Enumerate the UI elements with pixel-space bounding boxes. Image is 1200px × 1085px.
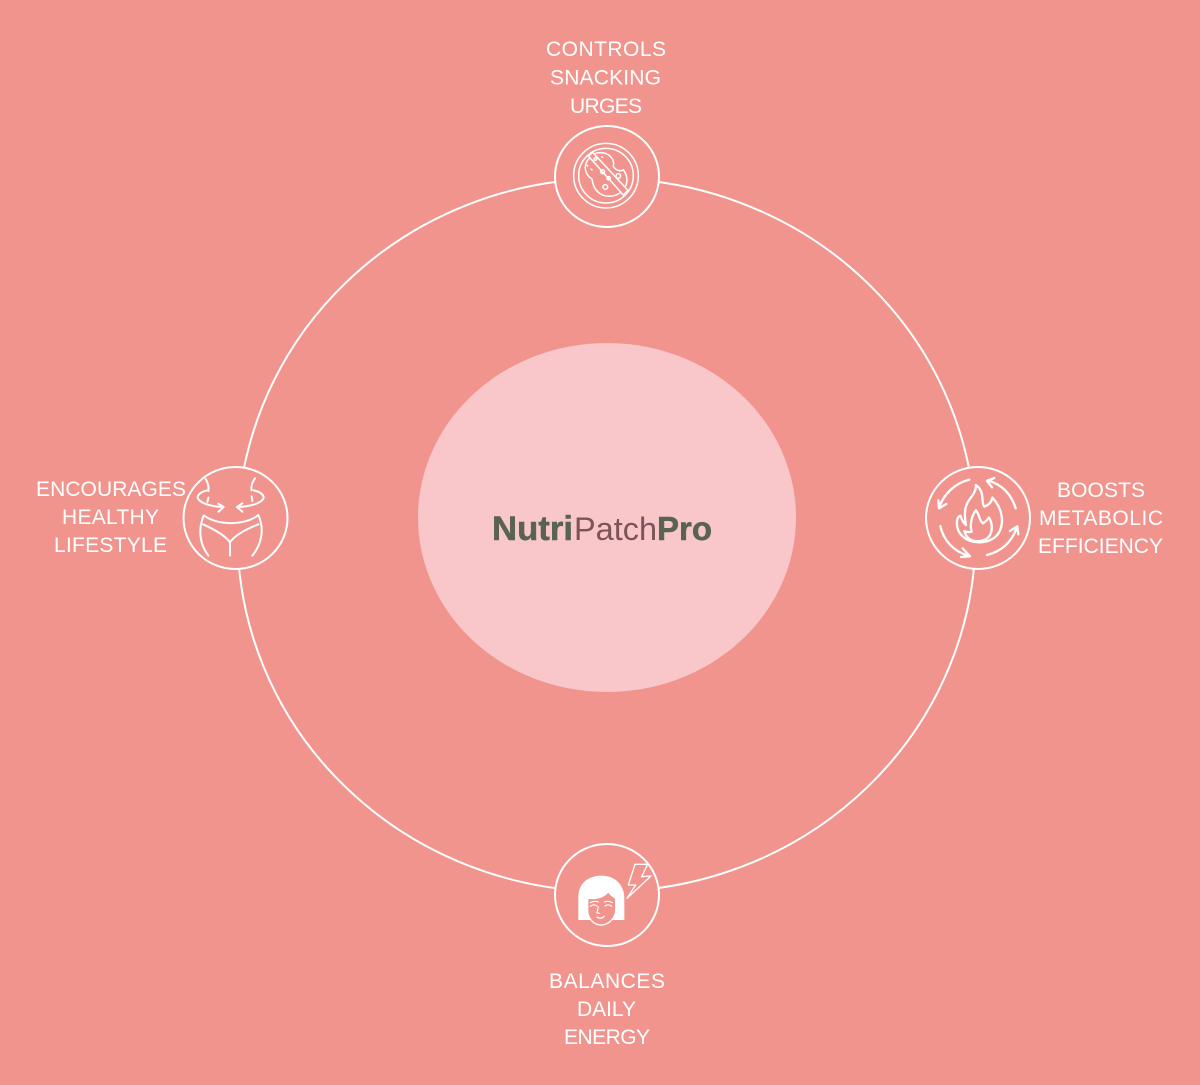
label: controls snacking urges: SNACKING (550, 66, 661, 90)
node: balances daily energy (549, 844, 665, 1049)
label: boosts metabolic efficiency: METABOLIC (1039, 507, 1163, 530)
icon circle bottom (555, 844, 659, 946)
icon: flame with cycle arrows (938, 478, 1018, 557)
logo: NutriPatchPro (492, 510, 712, 548)
icon: woman's face with lightning bolt (578, 864, 651, 925)
icon circle top (555, 126, 659, 227)
label: boosts metabolic efficiency (1038, 479, 1163, 558)
node: controls snacking urges (546, 38, 666, 227)
label: controls snacking urges (546, 38, 666, 118)
label: encourages healthy lifestyle: HEALTHY (62, 506, 159, 529)
label: controls snacking urges: URGES (570, 95, 642, 118)
label: controls snacking urges: CONTROLS (546, 38, 666, 61)
logo: NutriPatchPro: Pro (657, 510, 712, 547)
label: balances daily energy (549, 970, 665, 1049)
icon circle right (926, 467, 1030, 569)
logo: NutriPatchPro: Patch (574, 511, 657, 547)
label: balances daily energy: DAILY (577, 998, 636, 1021)
label: balances daily energy: BALANCES (549, 970, 665, 993)
label: encourages healthy lifestyle: ENCOURAGES (36, 478, 186, 501)
icon circle left (184, 467, 288, 569)
label: encourages healthy lifestyle (36, 478, 186, 557)
logo: NutriPatchPro: Nutri (492, 510, 573, 548)
node: encourages healthy lifestyle (36, 467, 288, 569)
icon: crossed-out cookie (574, 143, 638, 208)
label: boosts metabolic efficiency: EFFICIENCY (1038, 535, 1163, 558)
centre disc with logo (418, 343, 796, 692)
label: boosts metabolic efficiency: BOOSTS (1057, 479, 1145, 502)
node: boosts metabolic efficiency (926, 467, 1163, 569)
icon: waist with inward arrows (198, 478, 264, 556)
label: encourages healthy lifestyle: LIFESTYLE (54, 534, 167, 557)
outer orbit ring (238, 178, 976, 892)
label: balances daily energy: ENERGY (564, 1026, 650, 1049)
